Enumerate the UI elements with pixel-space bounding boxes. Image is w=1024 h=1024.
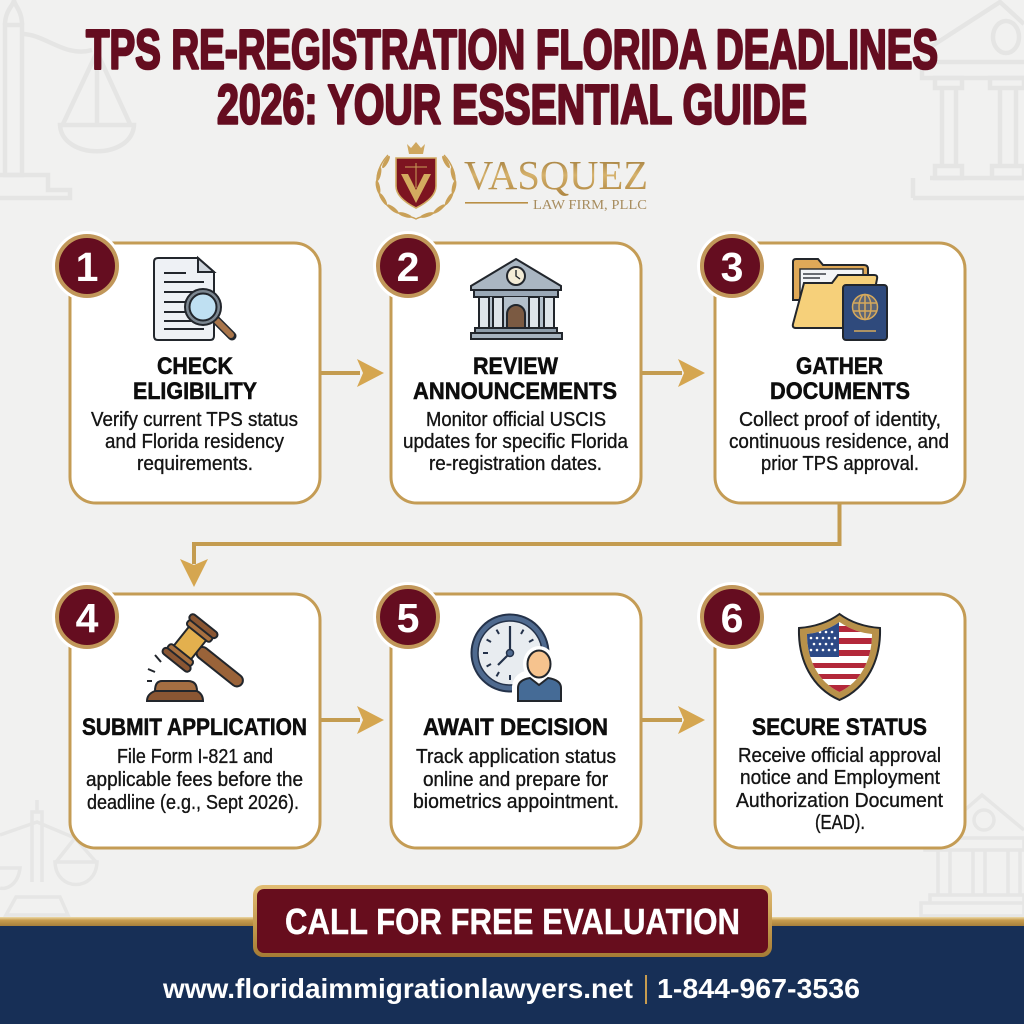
step description: notice and Employment [740, 767, 940, 789]
step description [91, 409, 298, 475]
panel: step 3 gather documents [697, 231, 965, 503]
step heading: AWAIT DECISION [423, 714, 608, 741]
step heading: CHECK [157, 353, 234, 380]
icon: document with magnifier [154, 258, 232, 340]
footer band [0, 926, 1024, 1024]
step description [86, 746, 303, 814]
icon: clock and person [470, 614, 568, 705]
badge 4 [57, 587, 117, 647]
step heading [770, 353, 910, 405]
call to action button [253, 885, 772, 957]
step heading [133, 353, 257, 405]
connector arrow: step 2 to 3 [641, 359, 705, 387]
logo: Vasquez Law Firm [375, 142, 648, 219]
step description: Receive official approval [738, 745, 941, 767]
badge 1 [57, 236, 117, 296]
badge 6 [702, 587, 762, 647]
step description: re-registration dates. [429, 453, 602, 475]
watermark: scales top left [0, 0, 134, 198]
icon: folder and passport [793, 259, 887, 340]
badge 2: 2 [397, 244, 419, 290]
icon: crown [407, 142, 425, 154]
sub wordmark: LAW FIRM, PLLC [533, 198, 647, 213]
call to action button: CALL FOR FREE EVALUATION [285, 901, 740, 942]
panel: step 5 await decision [373, 582, 641, 848]
watermark: scales bottom left [0, 800, 97, 915]
title [86, 18, 938, 136]
separator [645, 975, 647, 1004]
wordmark rule [465, 202, 528, 204]
badge 5: 5 [397, 595, 419, 641]
panel: step 2 review announcements [373, 231, 641, 503]
step description: continuous residence, and [729, 431, 949, 453]
step description [729, 409, 949, 475]
panel: step 1 check eligibility [52, 231, 320, 503]
icon: flag shield [799, 614, 880, 700]
step description [403, 409, 629, 475]
step heading: SECURE STATUS [752, 714, 927, 741]
step description: Track application status [416, 746, 616, 768]
step description [736, 745, 943, 834]
badge 3: 3 [721, 244, 743, 290]
connector arrow: step 1 to 2 [321, 359, 384, 387]
step description: Authorization Document [736, 790, 943, 812]
panel: step 4 submit application [52, 582, 320, 848]
step heading: GATHER [796, 353, 883, 380]
step heading: ELIGIBILITY [133, 378, 257, 405]
badge 5 [378, 587, 438, 647]
contact line [162, 973, 860, 1004]
icon: courthouse with clock [471, 259, 562, 339]
step description: biometrics appointment. [413, 791, 619, 813]
connector arrow: step 3 to 4 [180, 504, 840, 587]
badge 4: 4 [76, 595, 99, 641]
step heading: REVIEW [473, 353, 558, 380]
step description: and Florida residency [105, 431, 284, 453]
step description: (EAD). [815, 812, 865, 834]
wordmark: VASQUEZ [464, 152, 648, 198]
website: www.floridaimmigrationlawyers.net [162, 973, 633, 1004]
step description: Verify current TPS status [91, 409, 298, 431]
badge 2 [378, 236, 438, 296]
icon: shield [396, 158, 436, 208]
badge 3 [702, 236, 762, 296]
step description [413, 746, 619, 813]
watermark: courthouse bottom right [921, 795, 1024, 916]
step heading [413, 353, 617, 405]
icon: laurel wreath [375, 155, 457, 219]
icon: gavel [147, 613, 257, 704]
panel: step 6 secure status [697, 582, 965, 848]
watermark: courthouse top right [913, 2, 1024, 198]
step description: Monitor official USCIS [426, 409, 606, 431]
gold divider [0, 917, 1024, 926]
step description: Collect proof of identity, [739, 409, 941, 431]
step description: applicable fees before the [86, 769, 303, 791]
badge 1: 1 [76, 244, 98, 290]
phone number: 1-844-967-3536 [657, 973, 860, 1004]
step description: deadline (e.g., Sept 2026). [87, 792, 299, 814]
step description: updates for specific Florida [403, 431, 629, 453]
connector arrow: step 4 to 5 [321, 706, 384, 734]
step description: prior TPS approval. [761, 453, 919, 475]
connector arrow: step 5 to 6 [641, 706, 705, 734]
step heading: DOCUMENTS [770, 378, 910, 405]
step description: File Form I-821 and [117, 746, 273, 768]
badge 6: 6 [721, 595, 743, 641]
step heading: ANNOUNCEMENTS [413, 378, 617, 405]
step heading: SUBMIT APPLICATION [82, 714, 307, 741]
step description: online and prepare for [423, 769, 608, 791]
step description: requirements. [137, 453, 253, 475]
